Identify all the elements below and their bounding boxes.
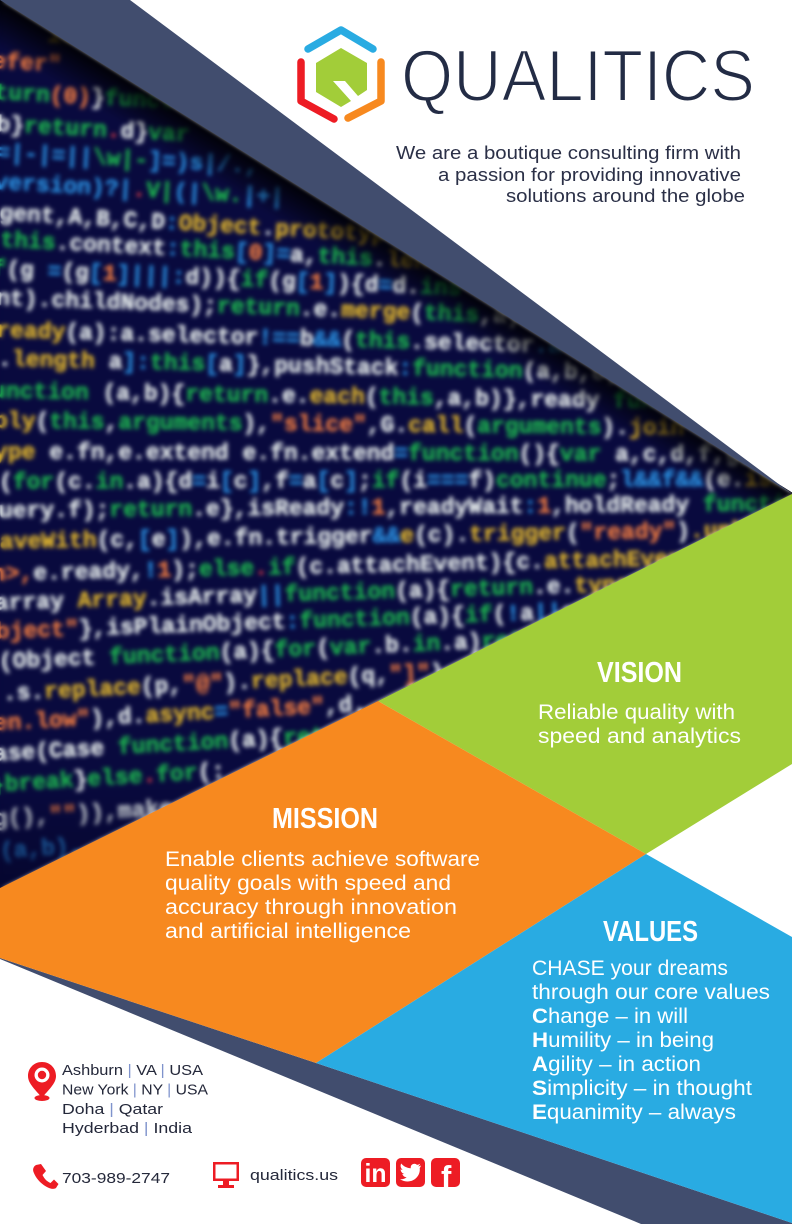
- code photograph background: (a,b), c.k: [0, 830, 139, 865]
- code photograph background: b}return.d}var: [0, 112, 190, 148]
- bottom navy diagonal band: [0, 958, 792, 1224]
- text: mission statement: quality goals with speed and: [165, 872, 451, 895]
- text: mission statement: [165, 848, 480, 943]
- tagline: solutions around the globe: [506, 185, 745, 206]
- code photograph background: ready(a):a.selector!==b&&(this.selector.a: [0, 318, 563, 360]
- code photograph background: array Array.isArray||function(a){return.e.type(a): [0, 571, 671, 617]
- phone number: 703-989-2747: [62, 1170, 170, 1187]
- office addresses: Hyderbad | India: [62, 1120, 193, 1137]
- icon: location pin: [28, 1062, 56, 1101]
- heading: mission: MISSION: [272, 803, 378, 835]
- panel: vision: [378, 494, 792, 854]
- logo icon: [301, 30, 381, 119]
- code photograph background: this.context:this[0]=a,this.len: [0, 227, 429, 275]
- icon: twitter: [396, 1158, 425, 1187]
- code photograph background: .s.replace(p,"@").replace(q,"]"): [2, 660, 445, 707]
- code photograph background: (Object function(a){for(var.b.in.a)ret: [0, 627, 524, 675]
- text: values list: Simplicity – in thought: [532, 1077, 752, 1100]
- tagline: We are a boutique consulting firm with: [396, 142, 741, 163]
- text: values list: CHASE your dreams: [532, 957, 728, 980]
- text: vision statement: Reliable quality with: [538, 701, 735, 724]
- code photograph background: unction (a,b){return.e.each(this,a,b)},ready functi: [0, 379, 696, 416]
- code photograph background: islan: [6, 20, 117, 52]
- text: values list: Change – in will: [532, 1005, 688, 1028]
- office addresses: New York | NY | USA: [62, 1082, 208, 1098]
- brand name: QUALITICS: [401, 36, 755, 117]
- code photograph background: en.low"),d.async="false",d.: [0, 692, 367, 737]
- icon: linkedin: in: [364, 1158, 386, 1188]
- panel: mission: [0, 701, 646, 1063]
- text: values list: [532, 957, 770, 1124]
- icon: facebook: [431, 1158, 460, 1194]
- heading: values: VALUES: [603, 916, 698, 948]
- code photograph background: version)?|.V|(|\w.|+|: [0, 170, 285, 211]
- code photograph background: ply(this,arguments),"slice",G.call(arguments).join: [0, 408, 684, 442]
- text: values list: Equanimity – always: [532, 1101, 736, 1124]
- office addresses: Doha | Qatar: [62, 1101, 163, 1118]
- text: values list: through our core values: [532, 981, 770, 1004]
- icon: facebook: f: [441, 1159, 452, 1194]
- text: mission statement: accuracy through innovation: [165, 896, 457, 919]
- text: values list: Humility – in being: [532, 1029, 714, 1052]
- text: mission statement: Enable clients achieve software: [165, 848, 480, 871]
- heading: vision: VISION: [597, 657, 682, 689]
- text: vision statement: speed and analytics: [538, 725, 741, 748]
- code photograph background: bject"},isPlainObject:function(a){if(!a||e.: [0, 599, 590, 645]
- code photograph background: nt).childNodes);return.e.merge(this,a): [0, 286, 521, 330]
- code photograph background: f(g =(g[1]|||:d)){if(g[1]){d=d.ins: [0, 256, 462, 302]
- office addresses: Ashburn | VA | USA: [62, 1062, 203, 1079]
- code photograph background: ase(Case function(a){ret: [0, 723, 325, 768]
- icon: monitor: [213, 1162, 239, 1188]
- website: qualitics.us: [250, 1167, 338, 1184]
- panel: values: [316, 854, 792, 1223]
- text: values list: Agility – in action: [532, 1053, 701, 1076]
- code photograph background: gent,A,B,C,D:Object.prototyp: [0, 201, 386, 248]
- depth of field blur on photo edges: [0, 1, 792, 888]
- code photograph background: aveWith(c,[e]),e.fn.trigger&&e(c).trigger("ready").unbind: [0, 517, 787, 555]
- tagline: [396, 142, 745, 206]
- code photograph background: =|-|=||\w|-]=)s|/.,: [0, 140, 259, 180]
- code photograph background: n>,e.ready,!1);else.if(c.attachEvent){c.attachEvent(: [0, 545, 710, 588]
- code photograph background: .length a]:this[a]},pushStack:function(a,b,c): [0, 347, 620, 387]
- office addresses: [62, 1062, 208, 1137]
- code photograph background: [0, 0, 792, 888]
- icon: phone: [33, 1164, 58, 1189]
- code photograph background: ype e.fn,e.extend e.fn.extend=function(){var a,c,d,f,g,h: [0, 439, 767, 468]
- text: mission statement: and artificial intelligence: [165, 920, 411, 943]
- tagline: a passion for providing innovative: [438, 164, 741, 185]
- top navy diagonal band: [0, 0, 792, 494]
- text: vision statement: [538, 701, 741, 748]
